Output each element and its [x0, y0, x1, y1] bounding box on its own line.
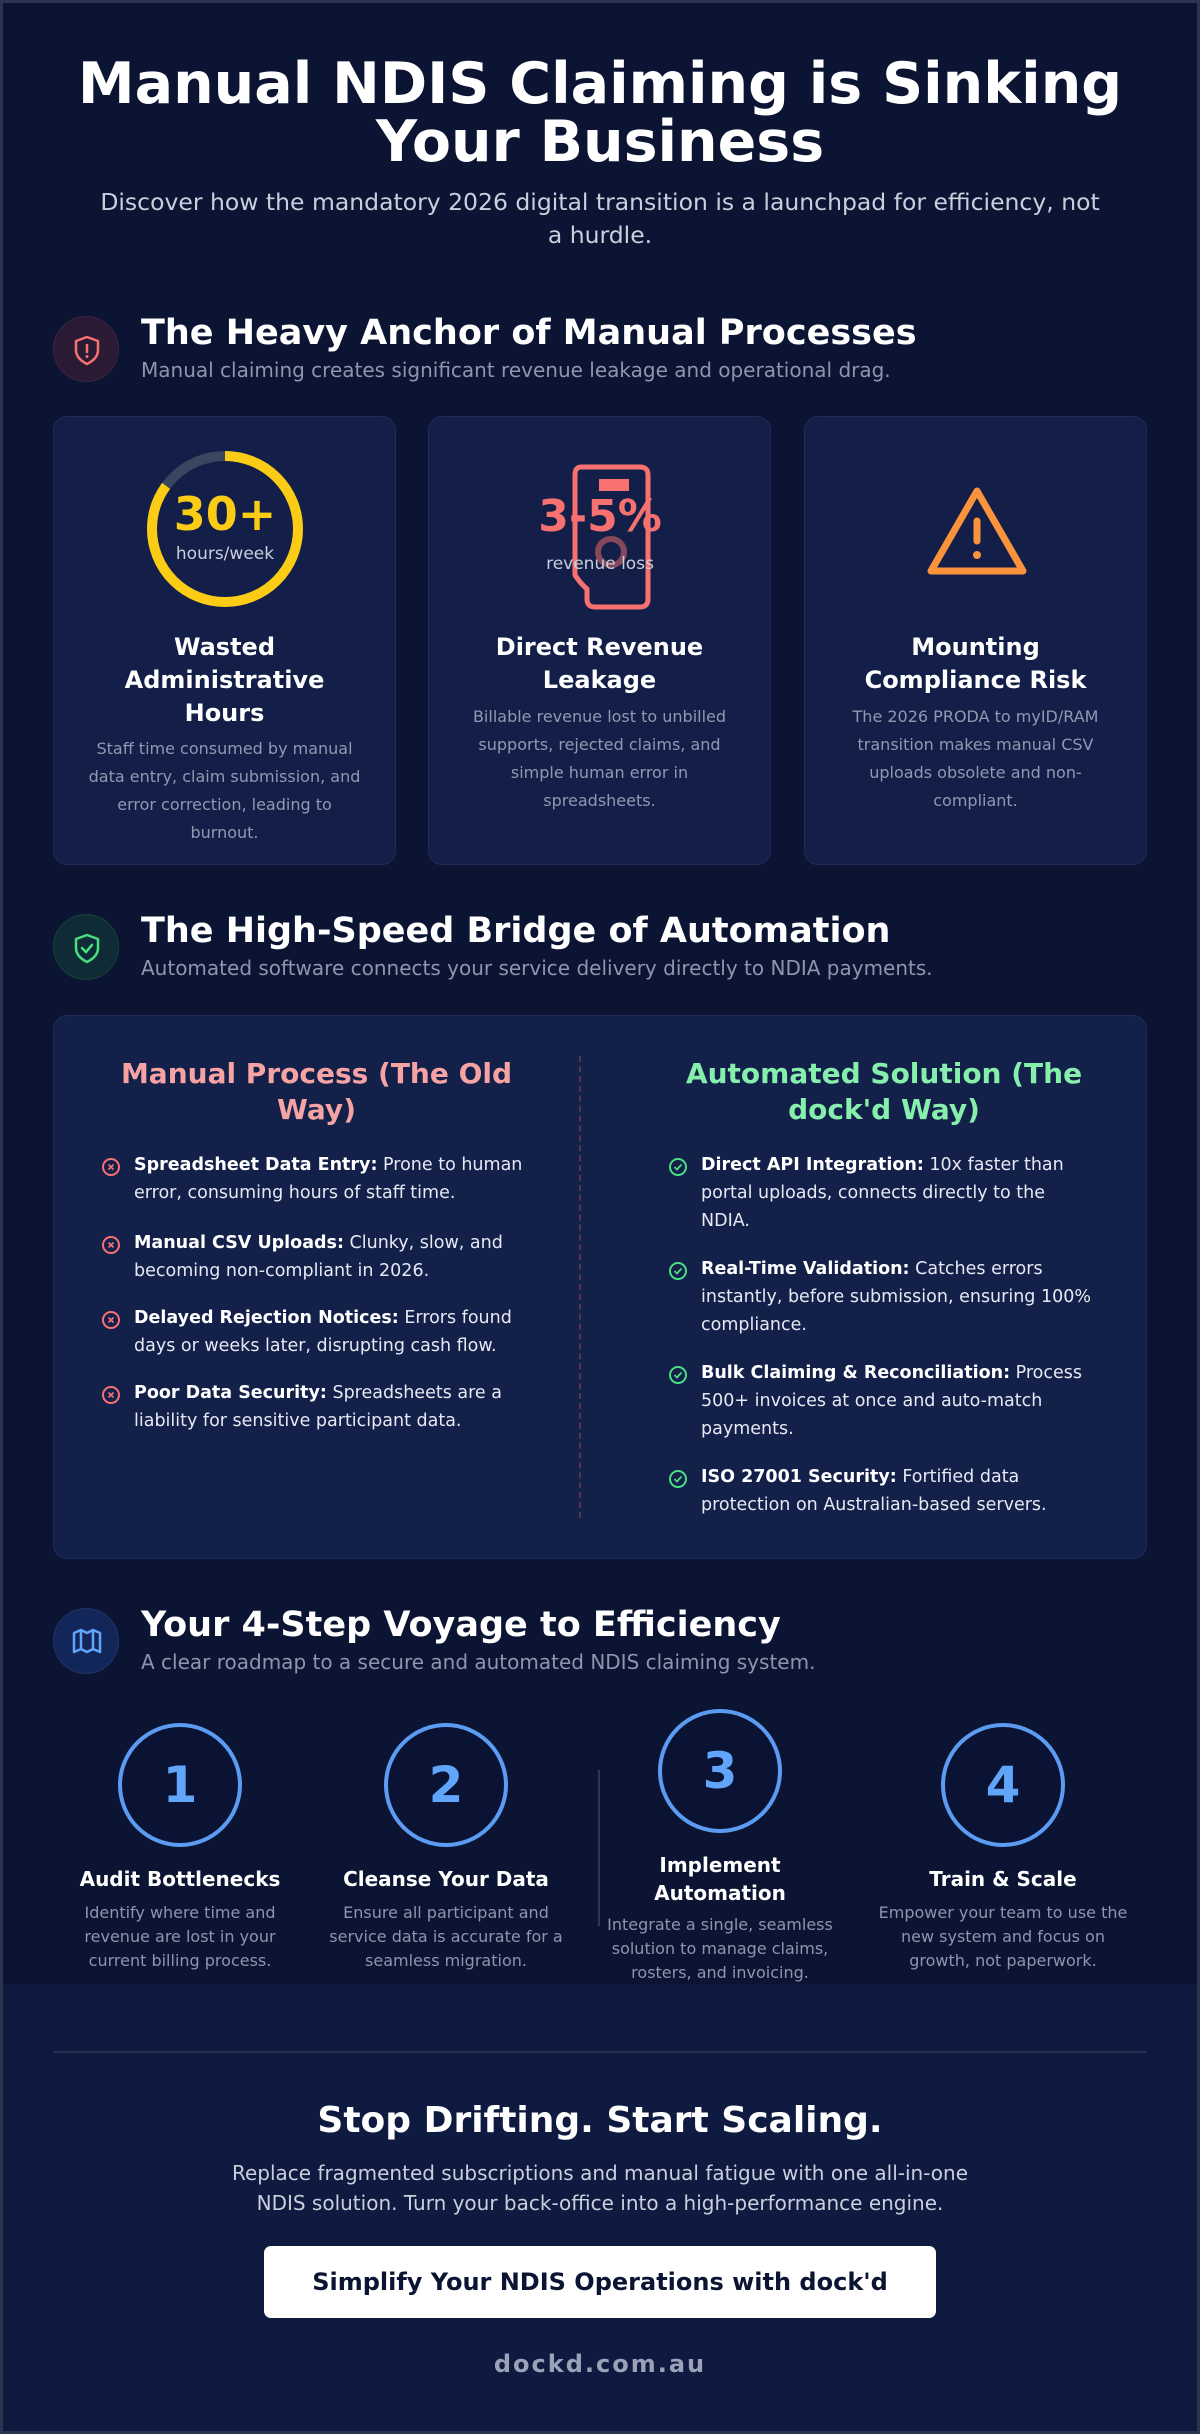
- subtitle: [100, 188, 1100, 249]
- card: compliance risk: [804, 416, 1147, 865]
- list: automated items: [669, 1155, 1091, 1515]
- icon: map: [53, 1608, 119, 1674]
- icon: shield alert: [53, 316, 119, 382]
- list: automated items: Real-Time Validation: Catches errors instantly, before submission, ensuring 100% compliance.: [701, 1259, 1091, 1335]
- icon: revenue loss receipt with stat: 3-5%: [538, 491, 662, 542]
- heading: automated solution: Automated Solution (The dock'd Way): [686, 1057, 1082, 1126]
- list: manual items: Poor Data Security: Spreadsheets are a liability for sensitive participant data.: [134, 1383, 502, 1431]
- card: revenue leakage: [428, 416, 771, 865]
- list: manual items: Delayed Rejection Notices: Errors found days or weeks later, disrupting cash flow.: [134, 1308, 512, 1356]
- section header: 4-step voyage: A clear roadmap to a secure and automated NDIS claiming system.: [141, 1650, 815, 1674]
- list: manual items: [102, 1155, 522, 1431]
- chart: 30+ ring: hours/week: [176, 544, 274, 564]
- list: automated items: Bulk Claiming & Reconciliation: Process 500+ invoices at once and auto-match payments.: [701, 1363, 1082, 1439]
- list: manual items: Spreadsheet Data Entry: Prone to human error, consuming hours of staff time.: [134, 1155, 522, 1203]
- card: wasted hours: Wasted Administrative Hours: [125, 633, 324, 727]
- section header: automation bridge: The High-Speed Bridge of Automation: [141, 911, 890, 951]
- CTA button: [264, 2246, 936, 2318]
- panel: comparison: [53, 1015, 1147, 1559]
- footer url: dockd.com.au: [494, 2350, 706, 2378]
- heading: manual process: Manual Process (The Old Way): [121, 1057, 512, 1126]
- step 1: Identify where time and revenue are lost in your current billing process.: [84, 1903, 276, 1970]
- icon: shield check: [53, 914, 119, 980]
- step 3: [607, 1709, 833, 1982]
- card: compliance risk: The 2026 PRODA to myID/RAM transition makes manual CSV uploads obsolete and non-compliant.: [853, 707, 1098, 810]
- section header: automation bridge: Automated software connects your service delivery directly to NDIA payments.: [141, 956, 933, 980]
- step 4: [879, 1723, 1127, 1970]
- section header: heavy anchor: [53, 313, 917, 382]
- CTA heading: Stop Drifting. Start Scaling.: [317, 2100, 883, 2141]
- chart: 30+ ring: [147, 451, 303, 607]
- card: wasted hours: Staff time consumed by manual data entry, claim submission, and error correction, leading to burnout.: [89, 739, 360, 842]
- list: manual items: Manual CSV Uploads: Clunky, slow, and becoming non-compliant in 2026.: [134, 1233, 503, 1281]
- title: Manual NDIS Claiming is Sinking Your Business: [78, 51, 1122, 175]
- section header: heavy anchor: Manual claiming creates significant revenue leakage and operational drag.: [141, 358, 891, 382]
- subtitle: a hurdle.: [548, 221, 652, 249]
- step 3: Implement: [659, 1853, 781, 1877]
- icon: revenue loss receipt with stat: [538, 464, 662, 610]
- section header: 4-step voyage: Your 4-Step Voyage to Efficiency: [141, 1605, 781, 1645]
- section header: 4-step voyage: [53, 1605, 815, 1674]
- card: revenue leakage: Billable revenue lost to unbilled supports, rejected claims, and simple human error in spreadsheets.: [473, 707, 726, 810]
- section header: heavy anchor: The Heavy Anchor of Manual Processes: [141, 313, 917, 353]
- step 3: Automation: [654, 1881, 786, 1905]
- step 2: 2: [429, 1756, 463, 1814]
- step 4: Empower your team to use the new system and focus on growth, not paperwork.: [879, 1903, 1127, 1970]
- step 3: 3: [703, 1742, 737, 1800]
- list: automated items: ISO 27001 Security: Fortified data protection on Australian-based servers.: [701, 1467, 1047, 1515]
- step 3: Integrate a single, seamless solution to manage claims, rosters, and invoicing.: [607, 1915, 833, 1982]
- step 1: 1: [163, 1756, 197, 1814]
- CTA text: Replace fragmented subscriptions and manual fatigue with one all-in-one NDIS solution. Turn your back-office into a high-performance engine.: [232, 2161, 968, 2215]
- icon: warning triangle: [928, 488, 1026, 574]
- card: compliance risk: Mounting Compliance Risk: [865, 633, 1086, 694]
- subtitle: Discover how the mandatory 2026 digital transition is a launchpad for efficiency, not: [100, 188, 1100, 216]
- step 4: Train & Scale: [929, 1867, 1077, 1891]
- step 1: Audit Bottlenecks: [80, 1867, 280, 1891]
- list: automated items: Direct API Integration: 10x faster than portal uploads, connects directly to the NDIA.: [701, 1155, 1064, 1231]
- step 2: [329, 1723, 563, 1970]
- chart: 30+ ring: 30+: [174, 487, 276, 541]
- step 1: [80, 1723, 280, 1970]
- CTA button: Simplify Your NDIS Operations with dock'd: [312, 2268, 888, 2296]
- step 2: Cleanse Your Data: [343, 1867, 549, 1891]
- step 4: 4: [986, 1756, 1020, 1814]
- card: revenue leakage: Direct Revenue Leakage: [496, 633, 703, 694]
- card: wasted hours: [53, 416, 396, 865]
- icon: revenue loss receipt with stat: revenue loss: [546, 554, 654, 574]
- step 2: Ensure all participant and service data is accurate for a seamless migration.: [329, 1903, 563, 1970]
- section header: automation bridge: [53, 911, 933, 980]
